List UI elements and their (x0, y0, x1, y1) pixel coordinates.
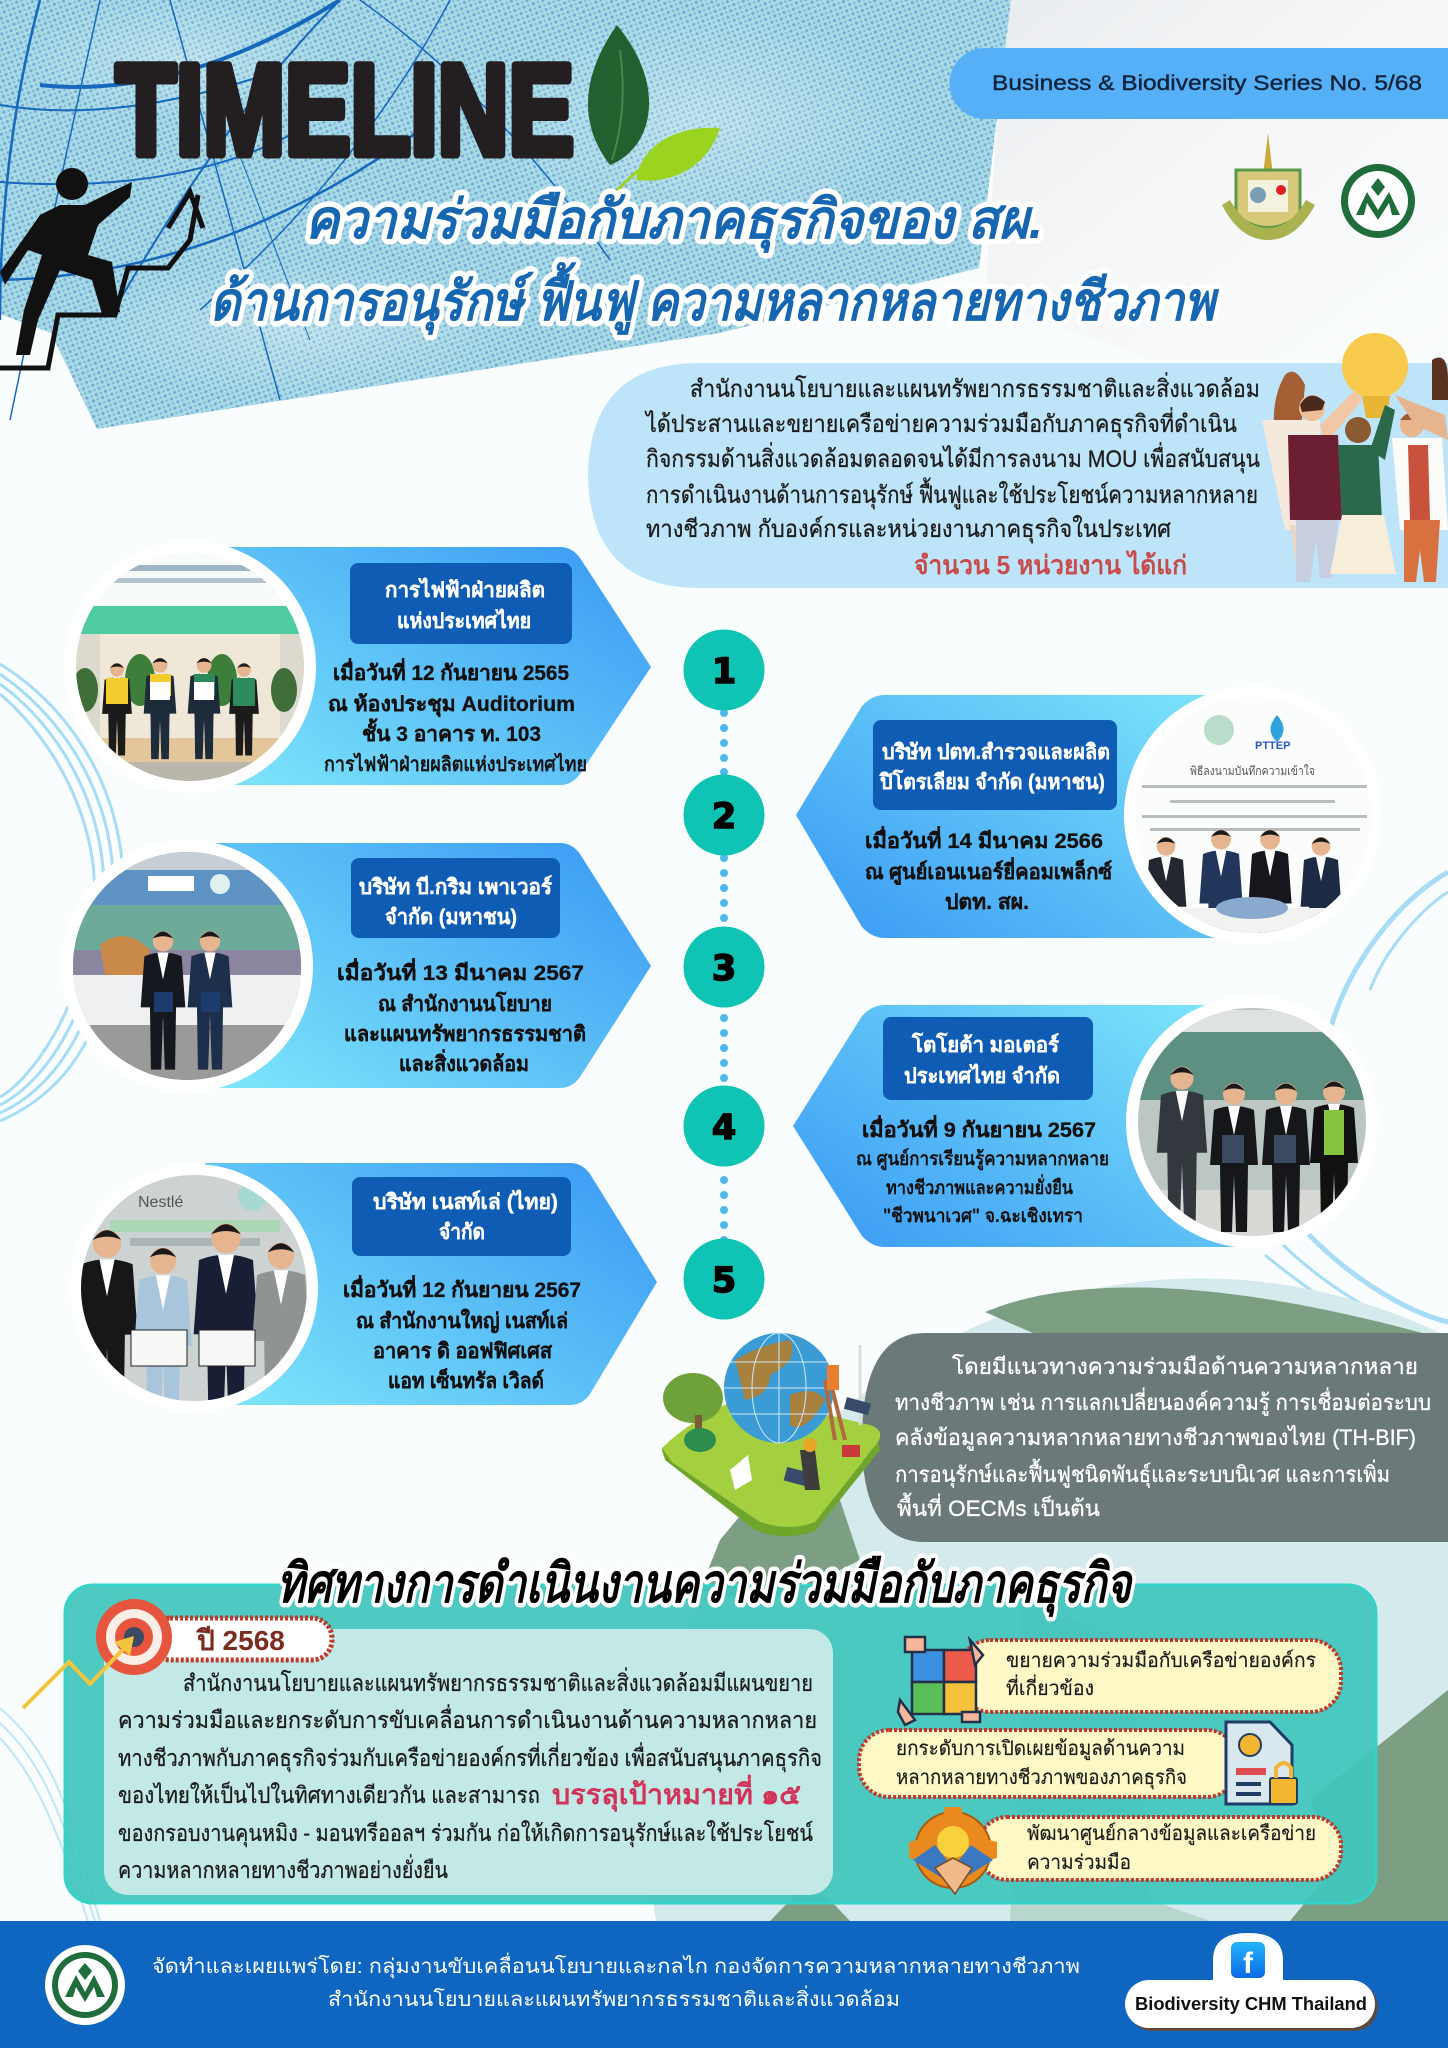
panel: collaboration guidelines: พื้นที่ OECMs เป็นต้น (897, 1493, 1100, 1521)
details 3: แอท เซ็นทรัล เวิลด์ (388, 1367, 544, 1393)
panel: collaboration guidelines: คลังข้อมูลความหลากหลายทางชีวภาพของไทย (TH-BIF) (895, 1425, 1416, 1451)
number 2 (684, 774, 764, 856)
details 1 (324, 657, 587, 776)
panel: collaboration guidelines (862, 1333, 1448, 1542)
crumpled paper background top right (986, 0, 1362, 284)
org label 1 (350, 563, 572, 644)
item: data center: ความร่วมมือ (1027, 1852, 1131, 1874)
inner text panel: บรรลุเป้าหมายที่ ๑๕ (552, 1774, 801, 1812)
item: disclosure (859, 1730, 1237, 1797)
card 5: Toyota (793, 996, 1380, 1248)
card 1: EGAT (64, 541, 651, 793)
details 5: เมื่อวันที่ 9 กันยายน 2567 (862, 1114, 1096, 1142)
details 3: ณ สำนักงานใหญ่ เนสท์เล่ (356, 1308, 568, 1334)
intro text: การดำเนินงานด้านการอนุรักษ์ ฟื้นฟูและใช้ประโยชน์ความหลากหลาย (646, 477, 1258, 510)
photo circle 4: PTTEP (1255, 740, 1290, 752)
inner text panel: สำนักงานนโยบายและแผนทรัพยากรธรรมชาติและสิ่งแวดล้อมมีแผนขยาย (183, 1667, 813, 1696)
inner text panel: ของไทยให้เป็นไปในทิศทางเดียวกัน และสามารถ (118, 1780, 540, 1808)
panel: collaboration guidelines: การอนุรักษ์และฟื้นฟูชนิดพันธุ์และระบบนิเวศ และการเพิ่ม (895, 1459, 1390, 1488)
details 2: ณ สำนักงานนโยบาย (378, 991, 552, 1016)
org label 4 (873, 720, 1117, 810)
details 2: และสิ่งแวดล้อม (399, 1048, 529, 1076)
details 4: ปตท. สผ. (945, 891, 1029, 914)
icon: puzzle hands (898, 1637, 983, 1725)
details 3: อาคาร ดิ ออฟฟิศเศส (373, 1340, 552, 1363)
icon: gear handshake (909, 1807, 997, 1894)
number 5 (684, 1238, 764, 1320)
details 1: ณ ห้องประชุม Auditorium (328, 692, 575, 718)
number 4: 4 (712, 1108, 736, 1148)
details 2: และแผนทรัพยากรธรรมชาติ (344, 1023, 586, 1046)
icon: document with lock (1226, 1722, 1297, 1804)
details 1: ชั้น 3 อาคาร ท. 103 (362, 718, 541, 746)
photo circle 5 (1126, 996, 1380, 1248)
org label 3: จำกัด (439, 1221, 485, 1244)
facebook badge (1125, 1933, 1378, 2031)
details 5: ณ ศูนย์การเรียนรู้ความหลากหลาย (856, 1148, 1109, 1171)
details 5: ทางชีวภาพและความยั่งยืน (886, 1174, 1073, 1199)
number 3 (684, 926, 764, 1008)
inner text panel: ทางชีวภาพกับภาคธุรกิจร่วมกับเครือข่ายองค์กรที่เกี่ยวข้อง เพื่อสนับสนุนภาคธุรกิจ (118, 1742, 822, 1772)
org label 3: บริษัท เนสท์เล่ (ไทย) (373, 1189, 558, 1214)
footer (0, 1921, 1448, 2048)
footer credits: สำนักงานนโยบายและแผนทรัพยากรธรรมชาติและสิ่งแวดล้อม (328, 1985, 900, 2011)
org label 3 (352, 1177, 571, 1256)
org label 2: จำกัด (มหาชน) (385, 906, 517, 929)
footer credits (152, 1952, 1080, 2011)
details 3: เมื่อวันที่ 12 กันยายน 2567 (343, 1274, 581, 1302)
panel: direction of operations (23, 1585, 1376, 1903)
intro highlight: จำนวน 5 หน่วยงาน ได้แก่ (914, 549, 1187, 580)
icon: runner on stairs with arrow (0, 168, 203, 368)
subtitle line 2: ด้านการอนุรักษ์ ฟื้นฟู ความหลากหลายทางชีวภาพ (210, 261, 1220, 335)
year pill: ปี 2568 (195, 1625, 285, 1656)
background: lower left wave lines (0, 1708, 100, 1921)
org label 4: ปิโตรเลียม จำกัด (มหาชน) (878, 769, 1105, 794)
panel: collaboration guidelines: โดยมีแนวทางความร่วมมือด้านความหลากหลาย (952, 1354, 1418, 1379)
details 5 (856, 1114, 1109, 1227)
heading: direction: ทิศทางการดำเนินงานความร่วมมือกับภาคธุรกิจ (277, 1554, 1134, 1617)
number 3: 3 (712, 949, 736, 989)
number 2: 2 (712, 797, 736, 837)
inner text panel: ความหลากหลายทางชีวภาพอย่างยั่งยืน (118, 1854, 448, 1883)
org label 2: บริษัท บี.กริม เพาเวอร์ (359, 875, 553, 899)
background: halftone blue banner (0, 0, 1011, 429)
logo: ONEP round (1341, 164, 1415, 238)
number 5: 5 (712, 1261, 736, 1301)
photo circle 3: Nestlé (138, 1194, 183, 1211)
org label 5: ประเทศไทย จำกัด (904, 1063, 1060, 1088)
org label 1: การไฟฟ้าฝ่ายผลิต (385, 577, 545, 602)
number 1: 1 (712, 652, 736, 692)
details 1: เมื่อวันที่ 12 กันยายน 2565 (333, 657, 569, 685)
intro text: สำนักงานนโยบายและแผนทรัพยากรธรรมชาติและสิ่งแวดล้อม (690, 372, 1260, 403)
org label 2 (351, 858, 560, 938)
photo circle 2 (61, 840, 313, 1092)
details 2: เมื่อวันที่ 13 มีนาคม 2567 (337, 957, 584, 985)
background: right wave lines (1265, 872, 1448, 1357)
intro text: กิจกรรมด้านสิ่งแวดล้อมตลอดจนได้มีการลงนาม MOU เพื่อสนับสนุน (646, 442, 1260, 474)
details 1: การไฟฟ้าฝ่ายผลิตแห่งประเทศไทย (324, 752, 587, 776)
year pill (150, 1618, 332, 1660)
facebook badge: Biodiversity CHM Thailand (1135, 1993, 1367, 2014)
item: expand network: ที่เกี่ยวข้อง (1006, 1674, 1094, 1700)
footer credits: จัดทำและเผยแพร่โดย: กลุ่มงานขับเคลื่อนนโยบายและกลไก กองจัดการความหลากหลายทางชีวภาพ (152, 1952, 1080, 1979)
org label 4: บริษัท ปตท.สำรวจและผลิต (882, 741, 1110, 764)
inner text panel: ของกรอบงานคุนหมิง - มอนทรีออลฯ ร่วมกัน ก่อให้เกิดการอนุรักษ์และใช้ประโยชน์ (118, 1820, 813, 1847)
subtitle line 1: ความร่วมมือกับภาคธุรกิจของ สผ. (305, 190, 1043, 253)
card 3: Nestle (70, 1163, 657, 1426)
details 3 (343, 1274, 581, 1393)
item: data center (979, 1817, 1341, 1880)
intro text (644, 372, 1260, 544)
photo circle 1 (76, 547, 316, 785)
illustration: globe on green island (662, 1333, 880, 1536)
background: globe grid lines (0, 0, 610, 420)
series pill: Business & Biodiversity Series No. 5/68 (992, 72, 1422, 95)
intro text: ได้ประสานและขยายเครือข่ายความร่วมมือกับภาคธุรกิจที่ดำเนิน (644, 407, 1237, 439)
item: disclosure: ยกระดับการเปิดเผยข้อมูลด้านความ (896, 1738, 1185, 1761)
facebook badge: f (1243, 1947, 1254, 1980)
photo circle 3 (81, 1164, 318, 1405)
number 1 (684, 630, 764, 710)
icon: leaves (588, 25, 720, 195)
logo: ministry crest (1222, 133, 1315, 240)
photo circle 4 (1124, 695, 1367, 938)
org label 5 (883, 1017, 1093, 1100)
inner text panel: ความร่วมมือและยกระดับการขับเคลื่อนการดำเนินงานด้านความหลากหลาย (118, 1704, 817, 1733)
details 4: เมื่อวันที่ 14 มีนาคม 2566 (865, 825, 1103, 853)
item: data center: พัฒนาศูนย์กลางข้อมูลและเครือข่าย (1027, 1822, 1316, 1846)
icon: target with arrow (23, 1599, 172, 1708)
title: TIMELINE: TIMELINE (116, 39, 574, 182)
details 2 (337, 957, 586, 1076)
item: expand network: ขยายความร่วมมือกับเครือข่ายองค์กร (1006, 1649, 1316, 1672)
org label 1: แห่งประเทศไทย (397, 608, 531, 633)
series pill (950, 48, 1448, 119)
details 5: "ชีวพนาเวศ" จ.ฉะเชิงเทรา (883, 1205, 1083, 1227)
number 4 (684, 1086, 764, 1166)
org label 5: โตโยต้า มอเตอร์ (911, 1032, 1060, 1057)
illustration: people holding lightbulb (1262, 333, 1448, 582)
details 4: ณ ศูนย์เอนเนอร์ยี่คอมเพล็กซ์ (865, 856, 1112, 886)
inner text panel (104, 1629, 833, 1895)
panel: introduction (588, 363, 1448, 588)
footer logo (45, 1945, 125, 2025)
intro text: ทางชีวภาพ กับองค์กรและหน่วยงานภาคธุรกิจในประเทศ (646, 515, 1171, 544)
background: earth with continents (649, 1278, 1448, 1921)
photo circle 4: พิธีลงนามบันทึกความเข้าใจ (1190, 764, 1315, 778)
item: disclosure: หลากหลายทางชีวภาพของภาคธุรกิจ (896, 1767, 1187, 1790)
timeline dotted connector (720, 709, 728, 1244)
item: expand network (960, 1640, 1341, 1712)
card 4: PTTEP (796, 695, 1367, 938)
background: left wave lines (0, 664, 123, 1121)
card 2: B.Grimm (61, 840, 651, 1092)
details 4 (865, 825, 1112, 914)
